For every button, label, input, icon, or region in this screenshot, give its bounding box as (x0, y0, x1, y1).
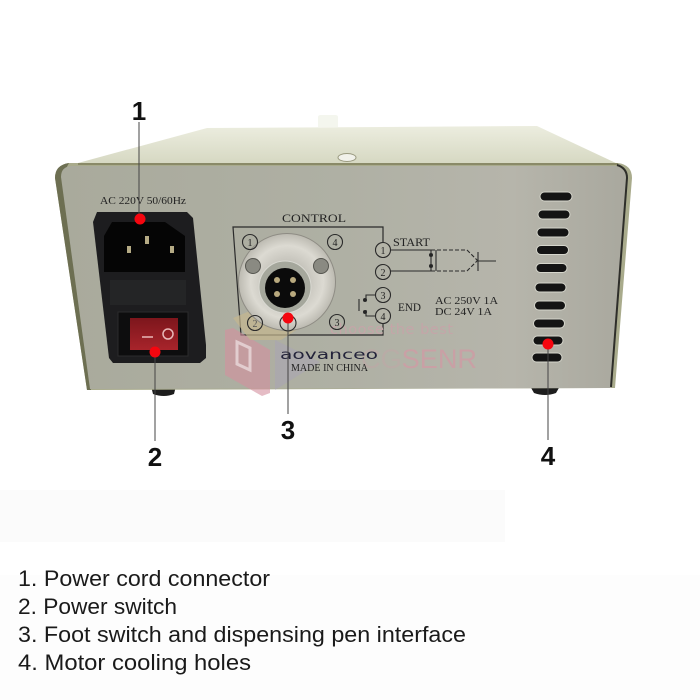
callout 4 (541, 338, 556, 471)
label: ratings: AC 250V 1A (435, 296, 499, 307)
label: made in china: MADE IN CHINA (291, 363, 369, 374)
callout 1 (132, 96, 146, 224)
label: ratings (435, 296, 499, 318)
callout 2: 2 (148, 442, 162, 472)
top panel (78, 126, 618, 164)
brand: advanced: aovanceo (280, 348, 378, 363)
device: enclosure (55, 115, 632, 396)
legend text: 1. Power cord connector (18, 566, 270, 591)
end switch schematic (359, 295, 375, 316)
watermark: choose the best (330, 322, 453, 338)
top panel screw (338, 154, 356, 162)
watermark (225, 298, 477, 396)
front face (61, 166, 626, 389)
pin number circles: 1 (380, 246, 386, 257)
switch symbols (142, 329, 173, 339)
pin number circles: 3 (380, 291, 386, 302)
control wiring frame (233, 227, 383, 335)
pin number circles: 3 (334, 318, 340, 329)
start switch schematic (391, 250, 496, 271)
callout 3: 3 (281, 415, 295, 445)
label: ratings: DC 24V 1A (435, 307, 493, 318)
pin number circles: 1 (248, 238, 252, 249)
right edge shadow (611, 165, 627, 387)
left shell strip (55, 163, 91, 390)
legend text: 3. Foot switch and dispensing pen interface (18, 622, 466, 647)
feet (151, 386, 560, 396)
callout 1: 1 (132, 96, 146, 126)
power socket module (93, 212, 206, 363)
rocker housing (118, 312, 188, 356)
inlet cavity (104, 222, 185, 272)
pin number circles: 4 (332, 238, 338, 249)
legend text (18, 566, 466, 675)
pin number circles: 2 (380, 268, 386, 279)
label: START: START (393, 237, 430, 249)
legend text: 4. Motor cooling holes (18, 650, 251, 675)
pin number circles: 2 (252, 319, 258, 330)
control heading: CONTROL (282, 211, 346, 225)
label: AC rating: AC 220V 50/60Hz (100, 196, 186, 207)
top knob (318, 115, 338, 127)
front top edge (78, 163, 618, 165)
fuse drawer (110, 280, 186, 305)
label: END: END (398, 302, 421, 314)
outer shell (55, 163, 632, 390)
cooling vent slots (532, 192, 572, 362)
red rocker switch (130, 318, 178, 350)
legend text: 2. Power switch (18, 594, 177, 619)
callout 2 (148, 346, 162, 472)
callout 4: 4 (541, 441, 556, 471)
pin number circles (242, 234, 390, 331)
watermark: CGSENR (361, 344, 477, 374)
aviation connector (238, 234, 336, 330)
callout 3 (281, 312, 295, 445)
inlet pins (127, 236, 174, 253)
pin number circles: 4 (380, 312, 386, 323)
